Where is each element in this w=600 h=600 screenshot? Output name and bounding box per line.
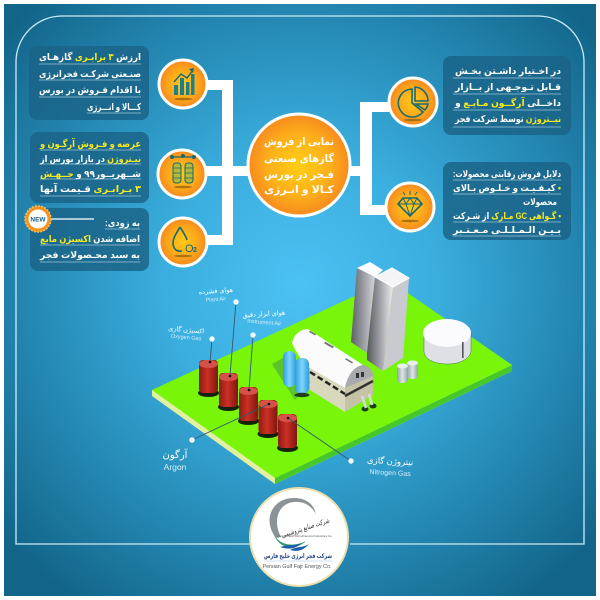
label: plant air: Plant Air [206, 296, 227, 304]
panel: competitive reasons: بـیـن الـمـلـلـی مـعـتـبر [452, 224, 561, 236]
panel: value tripled: ارزش ۳ برابـری گازهـای [39, 51, 141, 63]
panel: value tripled: با اقدام فـروش در بورس [39, 84, 141, 96]
label: argon [163, 403, 270, 472]
panel: value tripled [29, 46, 149, 120]
panel: competitive reasons: • گـواهی GC مـارک از شـرکت [453, 210, 561, 222]
panel: argon and nitrogen supply [30, 132, 149, 203]
central heading circle: گازهای صنعتی [264, 152, 335, 165]
small grey cylinders [397, 360, 418, 383]
panel: coming soon liquid oxygen: به زودی: [105, 217, 140, 229]
label: instrument air: هوای ابزار دقیق [242, 309, 286, 319]
label: argon: Argon [164, 462, 187, 472]
icon: oxygen drop: 2 [193, 247, 197, 254]
label: oxygen gas: Oxygen Gas [171, 334, 202, 342]
company logo: Persian Gulf Fajr Energy Co. [262, 564, 332, 570]
label: oxygen gas: اکسیژن گازی [168, 324, 205, 336]
panel: competitive reasons: • کیـفـیـت و خـلـوص بـالای [453, 182, 561, 194]
label: nitrogen gas [287, 417, 414, 478]
label: instrument air: Instrument Air [247, 319, 281, 327]
connector: left [205, 80, 250, 245]
red cylinders [198, 360, 298, 452]
label: nitrogen gas: نیتروژن گازی [367, 455, 414, 467]
icon: gas cylinders [158, 150, 206, 198]
panel: value tripled: صنـعتی شرکـت فجرانرژی [39, 68, 141, 80]
central heading circle [248, 114, 350, 216]
icon: diamond [386, 183, 434, 231]
plant illustration [152, 262, 512, 484]
panel: market share: داخــلی آرگــون مـایـع و [454, 96, 561, 109]
icon: rising bar chart [159, 60, 207, 108]
panel: argon and nitrogen supply: نیـتروژن در بازار بورس از [39, 153, 141, 165]
panel: market share [443, 56, 571, 135]
connector: right [350, 102, 400, 215]
icon: pie chart [389, 78, 437, 126]
panel: coming soon liquid oxygen [30, 208, 149, 271]
panel: market share: در اخـتیار داشـتن بخـش [455, 65, 561, 77]
panel: competitive reasons [443, 162, 571, 240]
panel: argon and nitrogen supply: عرضه و فـروش آرگـون و [39, 137, 141, 150]
label: plant air [199, 287, 239, 377]
central heading circle: فـجر در بورس [264, 169, 334, 181]
company logo: شرکت صنایع پتروشیمی [280, 517, 330, 540]
compressor building [292, 329, 373, 412]
panel: competitive reasons: دلایل فروش رقابتی محصولات: [453, 168, 561, 180]
cooling towers [351, 262, 409, 371]
label: argon: آرگون [163, 448, 189, 461]
company logo: شرکت فجر انرژی خلیج فارس [264, 553, 332, 560]
white storage tank [423, 319, 471, 364]
icon: oxygen drop [159, 218, 207, 266]
panel: argon and nitrogen supply: شــهریــور۹۹ و جــهـش [40, 168, 141, 180]
company logo: Persian Gulf Petrochemical Industries Co. [278, 534, 333, 538]
label: instrument air [242, 309, 286, 391]
label: oxygen gas [168, 324, 215, 363]
panel: market share: قـابل تـوجـهی از بــازار [454, 81, 561, 93]
panel: market share: نیــتروژن توسط شرکت فجر [454, 113, 561, 125]
central heading circle: کـالا و انـرژی [264, 184, 335, 196]
panel: value tripled: کـــالا و انـــرژی [87, 101, 141, 113]
outlet pipes [362, 394, 376, 412]
green platform [152, 280, 512, 484]
blue tanks [272, 351, 310, 400]
label: nitrogen gas: Nitrogen Gas [369, 469, 411, 478]
panel: competitive reasons: محصولات [523, 196, 557, 208]
panel: argon and nitrogen supply: ۳ بـرابـری قـیمت آنها [40, 182, 141, 195]
company logo [250, 488, 348, 586]
badge: new: NEW [30, 216, 46, 224]
panel: coming soon liquid oxygen: اضافه شدن اکسیژن مایع [40, 233, 140, 245]
central heading circle: نمایی از فروش [264, 136, 334, 148]
badge: new [25, 206, 94, 232]
label: plant air: هوای فشرده [199, 287, 234, 296]
icon: oxygen drop: O [185, 243, 194, 255]
panel: coming soon liquid oxygen: به سبد محـصولات فجر [39, 249, 140, 261]
